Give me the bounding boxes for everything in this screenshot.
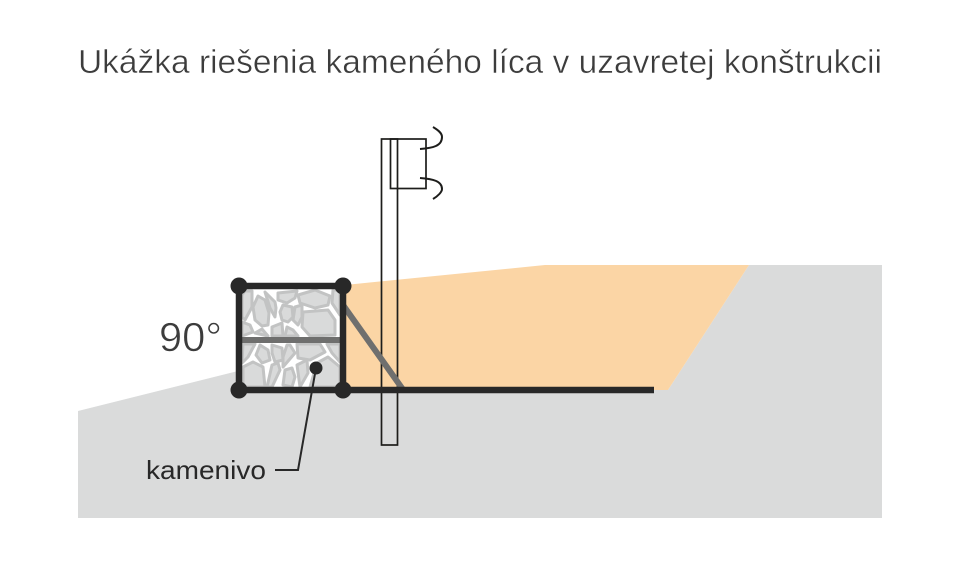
backfill [345, 265, 749, 390]
corner joints [230, 278, 352, 398]
aggregate callout: kamenivo [146, 455, 266, 485]
ground [78, 265, 882, 518]
grey mid bar and brace [239, 305, 404, 391]
title: Ukážka riešenia kameného líca v uzavretej konštrukcii [78, 43, 882, 80]
fence post with panel [382, 127, 442, 445]
gabion basket [230, 278, 654, 398]
aggregate callout [146, 362, 322, 485]
frame [239, 286, 654, 390]
angle label: 90° [159, 314, 222, 360]
stone fill [240, 288, 343, 390]
